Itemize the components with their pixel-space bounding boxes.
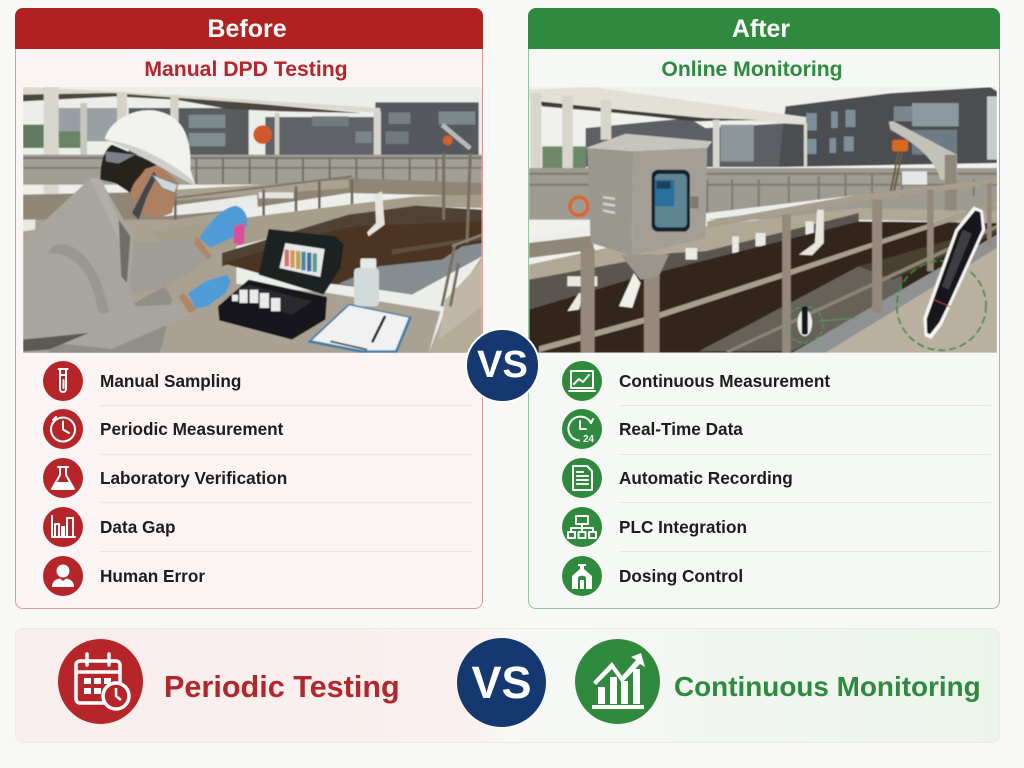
cabinet — [621, 255, 669, 280]
far railing and deck — [23, 155, 482, 185]
list item: periodic measurement — [43, 409, 284, 449]
label: Data Gap — [100, 517, 175, 537]
list item: real-time data — [562, 409, 743, 449]
canopy — [23, 87, 380, 113]
photo: monitoring cabinet and sensor at a treatment tank — [529, 87, 997, 353]
icon: monitor with trend line — [562, 361, 602, 401]
icon: calendar with clock — [58, 639, 143, 724]
icon: document — [562, 458, 602, 498]
clipboard — [307, 304, 412, 353]
test kit — [259, 229, 344, 295]
label: Laboratory Verification — [100, 468, 287, 488]
text: periodic testing: Periodic Testing — [164, 670, 400, 704]
VS badge: summary: VS — [471, 657, 532, 708]
icon: clock — [43, 409, 83, 449]
list item: human error — [43, 556, 205, 596]
VS badge: panels — [465, 328, 540, 403]
bottle — [360, 258, 376, 269]
panel: before — [15, 8, 483, 609]
label: Human Error — [100, 566, 205, 586]
life ring — [570, 197, 588, 215]
worker — [49, 286, 172, 353]
list item: automatic recording — [562, 458, 793, 498]
text: continuous monitoring: Continuous Monitoring — [674, 671, 981, 702]
label: Real-Time Data — [619, 419, 743, 439]
concrete and tank — [529, 208, 997, 286]
walkway — [825, 248, 997, 353]
list item: data gap — [43, 507, 175, 547]
list item: manual sampling — [43, 361, 241, 401]
canopy — [529, 87, 806, 125]
VS badge: panels: VS — [477, 344, 528, 386]
heading: after: After — [732, 15, 790, 43]
label: Continuous Measurement — [619, 371, 830, 391]
crane — [889, 121, 957, 180]
subheading: manual DPD testing: Manual DPD Testing — [144, 58, 348, 81]
icon: 24 hour clock — [562, 409, 602, 449]
ledge — [236, 283, 441, 353]
icon: rising bar chart — [575, 639, 660, 724]
label: Periodic Measurement — [100, 419, 283, 439]
subheading: online monitoring: Online Monitoring — [661, 58, 843, 81]
list item: dosing control — [562, 556, 743, 596]
mid railing — [529, 168, 997, 220]
photo: technician testing a sample at a treatment tank — [23, 87, 482, 353]
heading: before — [15, 8, 483, 49]
heading: before: Before — [207, 15, 287, 43]
label: Manual Sampling — [100, 371, 241, 391]
heading: after — [528, 8, 1000, 49]
list item: continuous measurement — [562, 361, 830, 401]
icon: person — [43, 556, 83, 596]
icon: dosing bottles — [562, 556, 602, 596]
VS badge: summary — [457, 638, 546, 727]
tank walls and water — [149, 195, 482, 250]
handrails — [529, 179, 997, 353]
icon: bar chart with gap — [43, 507, 83, 547]
label: PLC Integration — [619, 517, 747, 537]
icon: test tube — [43, 361, 83, 401]
list item: PLC integration — [562, 507, 747, 547]
summary banner — [15, 628, 1000, 743]
panel: after — [528, 8, 1000, 609]
label: Automatic Recording — [619, 468, 793, 488]
icon: 24 hour clock: 24 — [583, 434, 595, 445]
list item: laboratory verification — [43, 458, 287, 498]
label: Dosing Control — [619, 566, 743, 586]
sensors — [786, 206, 986, 350]
icon: flask — [43, 458, 83, 498]
icon: network hierarchy — [562, 507, 602, 547]
